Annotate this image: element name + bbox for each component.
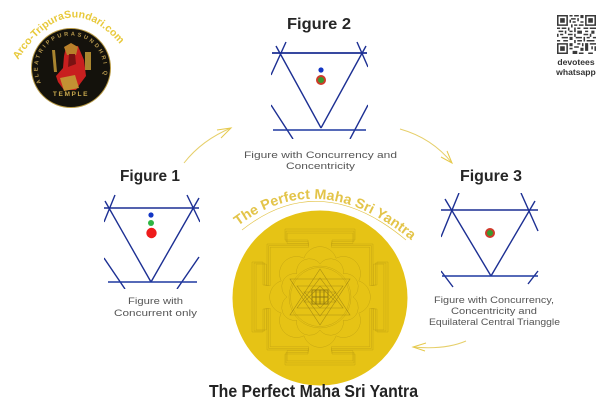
- arrow: figure 1 to figure 2: [184, 128, 231, 163]
- curved heading with underline: The Perfect Maha Sri Yantra: [232, 189, 414, 240]
- caption: figure 1: [114, 296, 197, 319]
- temple seal badge: TEMPLE: [53, 91, 89, 98]
- curved website text: Arco-TripuraSundari.com: [14, 10, 123, 60]
- panel: figure 3: [429, 168, 560, 328]
- lotus petal rings: [270, 247, 370, 347]
- QR caption: devotees: [557, 57, 595, 67]
- bhupura square frame: [252, 229, 388, 365]
- yantra drawing: [252, 229, 388, 365]
- QR caption: whatsapp: [555, 67, 596, 77]
- bottom title: The Perfect Maha Sri Yantra: [209, 381, 418, 401]
- caption: figure 2: Figure with Concurrency and: [244, 150, 397, 161]
- central emblem: [312, 290, 328, 304]
- golden disc: [232, 210, 408, 386]
- QR caption: [555, 57, 596, 77]
- diagram: figure 1 triangle: [104, 195, 200, 289]
- panel: perfect maha sri yantra: [209, 189, 418, 401]
- caption: figure 3: Concentricity and: [451, 306, 537, 317]
- caption: figure 2: [244, 150, 397, 172]
- arrow: figure 2 to figure 3: [400, 129, 452, 163]
- heading: figure 2: Figure 2: [287, 16, 351, 33]
- logo: temple website and seal: [14, 10, 123, 108]
- caption: figure 3: Equilateral Central Trianggle: [429, 317, 560, 328]
- panel: figure 1: [104, 168, 200, 319]
- caption: figure 2: Concentricity: [286, 161, 355, 172]
- heading: figure 1: Figure 1: [120, 168, 180, 185]
- caption: figure 3: [429, 295, 560, 328]
- heading: figure 3: Figure 3: [460, 168, 522, 185]
- caption: figure 1: Figure with: [128, 296, 183, 307]
- arrow: figure 3 to yantra: [413, 341, 466, 351]
- temple seal badge: [31, 28, 111, 108]
- caption: figure 1: Concurrent only: [114, 308, 197, 319]
- QR modules: [557, 15, 596, 54]
- caption: figure 3: Figure with Concurrency,: [434, 295, 554, 306]
- interlocking triangles: [290, 269, 350, 325]
- QR code: devotees whatsapp: [555, 15, 596, 77]
- diagram: figure 2 triangle: [271, 42, 368, 139]
- panel: figure 2: [244, 16, 397, 172]
- diagram: figure 3 triangle: [441, 193, 538, 287]
